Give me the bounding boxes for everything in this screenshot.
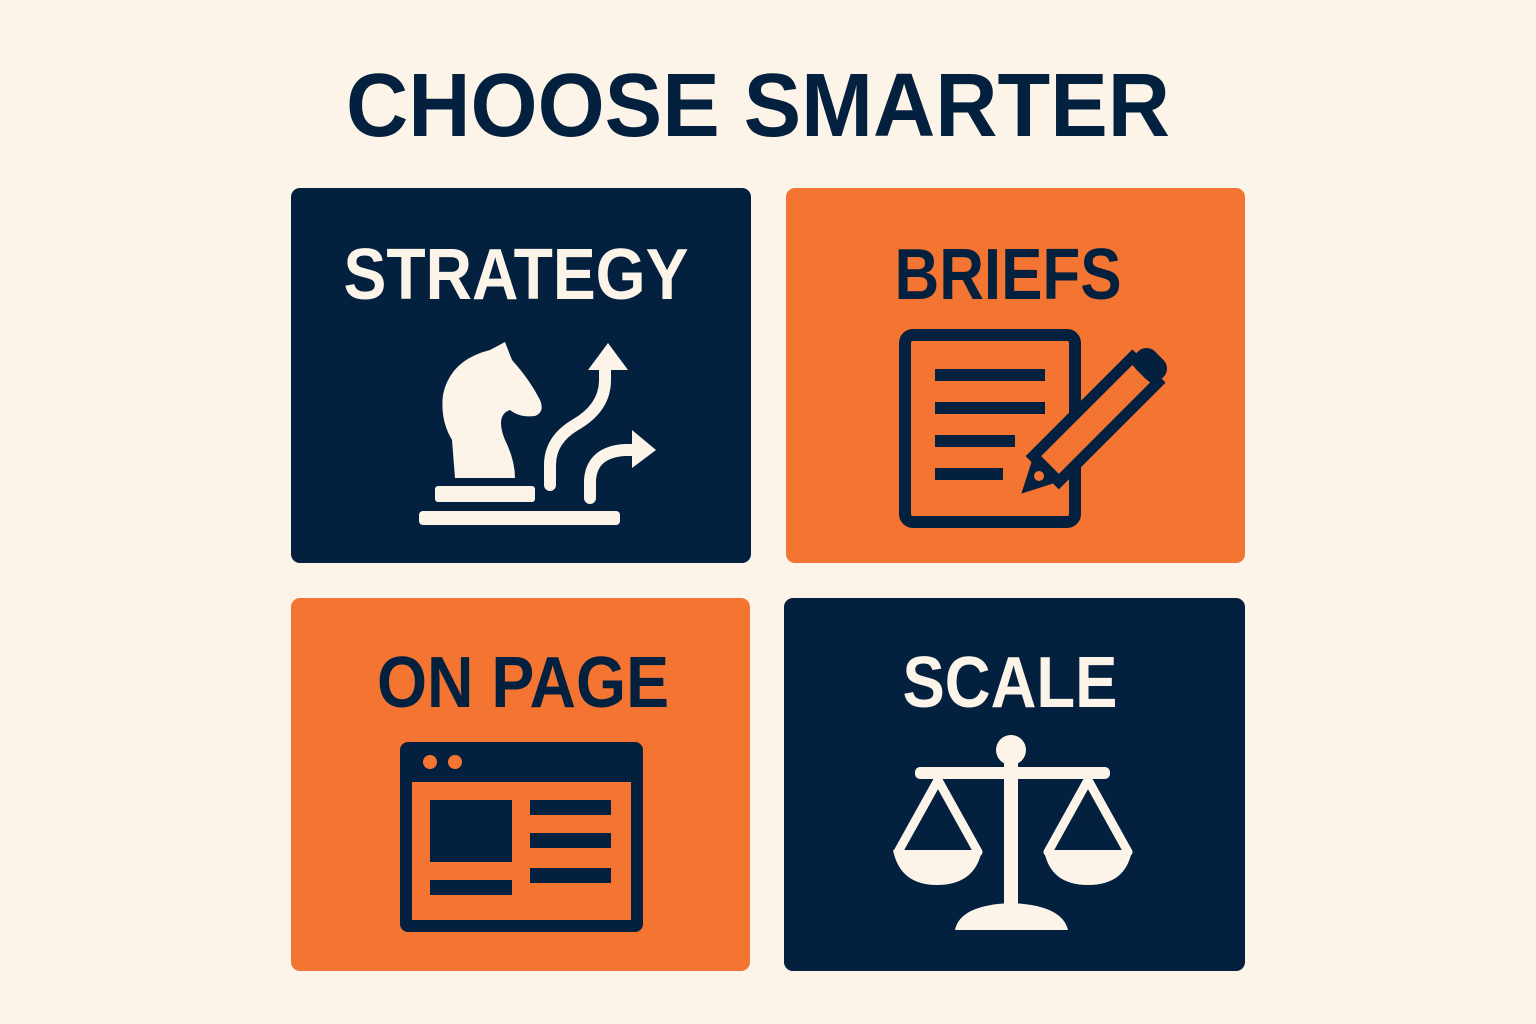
icon: browser window <box>400 742 643 932</box>
heading: briefs: BRIEFS <box>894 235 1122 315</box>
heading: scale: SCALE <box>902 643 1118 723</box>
panel: scale <box>784 598 1245 971</box>
title: CHOOSE SMARTER <box>346 56 1170 156</box>
panel: on page <box>291 598 750 971</box>
icon: knight with arrows <box>419 342 656 525</box>
icon: balance scale <box>893 735 1132 930</box>
panel: strategy <box>291 188 751 563</box>
icon: document with pencil <box>905 335 1172 522</box>
panel: briefs <box>786 188 1245 563</box>
heading: strategy: STRATEGY <box>344 235 688 315</box>
heading: on page: ON PAGE <box>377 643 669 723</box>
